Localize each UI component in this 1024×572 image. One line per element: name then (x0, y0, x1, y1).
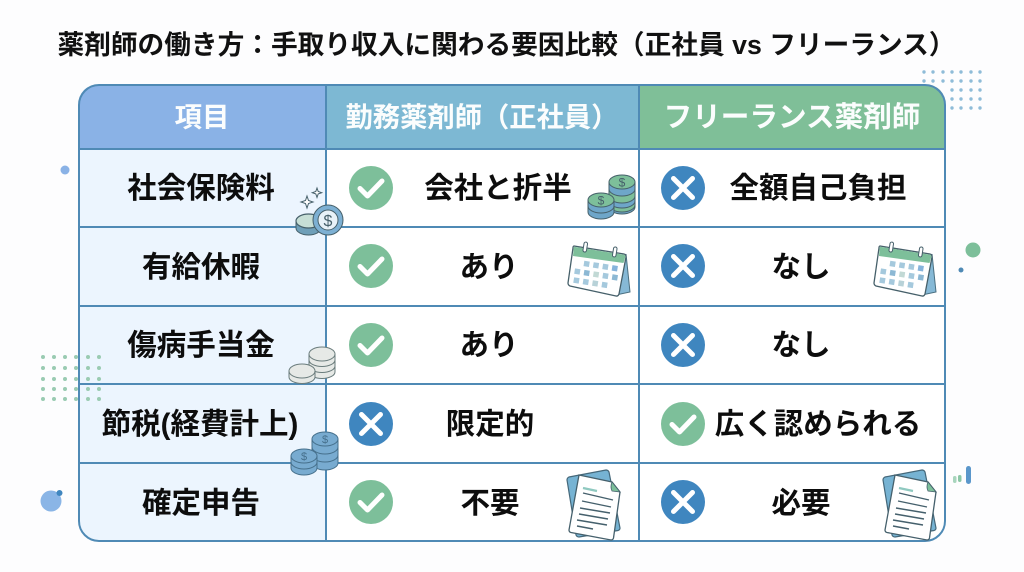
icon: documents (567, 470, 620, 540)
row: 有給休暇 (349, 244, 831, 288)
icon: cross (661, 323, 705, 367)
icon: calendar (568, 242, 630, 296)
icon: check (349, 244, 393, 288)
icon: cross (661, 166, 705, 210)
text: 広く認められる (715, 408, 921, 441)
row labels (102, 172, 298, 520)
decoration: dot grid left (41, 355, 101, 401)
icon: check (349, 166, 393, 210)
header: 勤務薬剤師（正社員） (326, 85, 639, 149)
panel: first column background (79, 149, 326, 541)
icon: cross (349, 402, 393, 446)
row: 社会保険料 (349, 166, 907, 210)
header: フリーランス薬剤師 (639, 85, 945, 149)
comparison table (79, 85, 945, 541)
icon: check (349, 323, 393, 367)
header: 項目: 項目 (174, 102, 230, 132)
icon: calendar (874, 242, 936, 296)
icon: cross (661, 480, 705, 524)
text: なし (771, 329, 831, 362)
header: 勤務薬剤師（正社員）: 勤務薬剤師（正社員） (346, 102, 618, 132)
icon: coin with sparkles: $ (324, 213, 333, 230)
header: フリーランス薬剤師: フリーランス薬剤師 (664, 102, 920, 134)
icon: silver coin stacks (289, 347, 335, 384)
decoration: dot grid top right (922, 70, 982, 110)
icon: coin with sparkles (296, 188, 343, 235)
header: 項目 (79, 85, 326, 149)
row: 確定申告 (349, 480, 831, 524)
row labels: 有給休暇 (142, 251, 260, 284)
row labels: 社会保険料 (127, 172, 275, 205)
text: あり (459, 251, 519, 284)
text: なし (771, 251, 831, 284)
text: 全額自己負担 (729, 172, 907, 205)
icon: documents (883, 470, 936, 540)
row: 節税 (349, 402, 921, 446)
icon: green and blue coin stacks (588, 175, 635, 219)
row labels: 傷病手当金 (127, 329, 275, 362)
icon: blue coin stacks: $ (322, 434, 328, 446)
title: 薬剤師の働き方：手取り収入に関わる要因比較（正社員 vs フリーランス） (58, 30, 955, 60)
panel: table body (79, 85, 945, 541)
row labels: 確定申告 (142, 487, 260, 520)
row labels: 節税(経費計上) (102, 408, 298, 441)
icon: blue coin stacks (291, 432, 338, 475)
decoration: bars (953, 466, 971, 484)
icon: green and blue coin stacks: $ (619, 176, 626, 190)
text: 会社と折半 (424, 172, 572, 205)
icon: cross (661, 244, 705, 288)
text: 必要 (771, 487, 831, 520)
text: 不要 (460, 487, 520, 520)
icon: check (661, 402, 705, 446)
decoration: small blue dot (60, 166, 70, 174)
row: 傷病手当金 (349, 323, 831, 367)
table grid (79, 85, 945, 541)
text: あり (459, 329, 519, 362)
icon: blue coin stacks: $ (301, 451, 307, 463)
decoration: blue circle with dot (40, 490, 62, 512)
text: 限定的 (446, 408, 534, 441)
icon: check (349, 480, 393, 524)
icon: green and blue coin stacks: $ (598, 194, 605, 208)
decoration: green circle and dot (958, 242, 980, 272)
